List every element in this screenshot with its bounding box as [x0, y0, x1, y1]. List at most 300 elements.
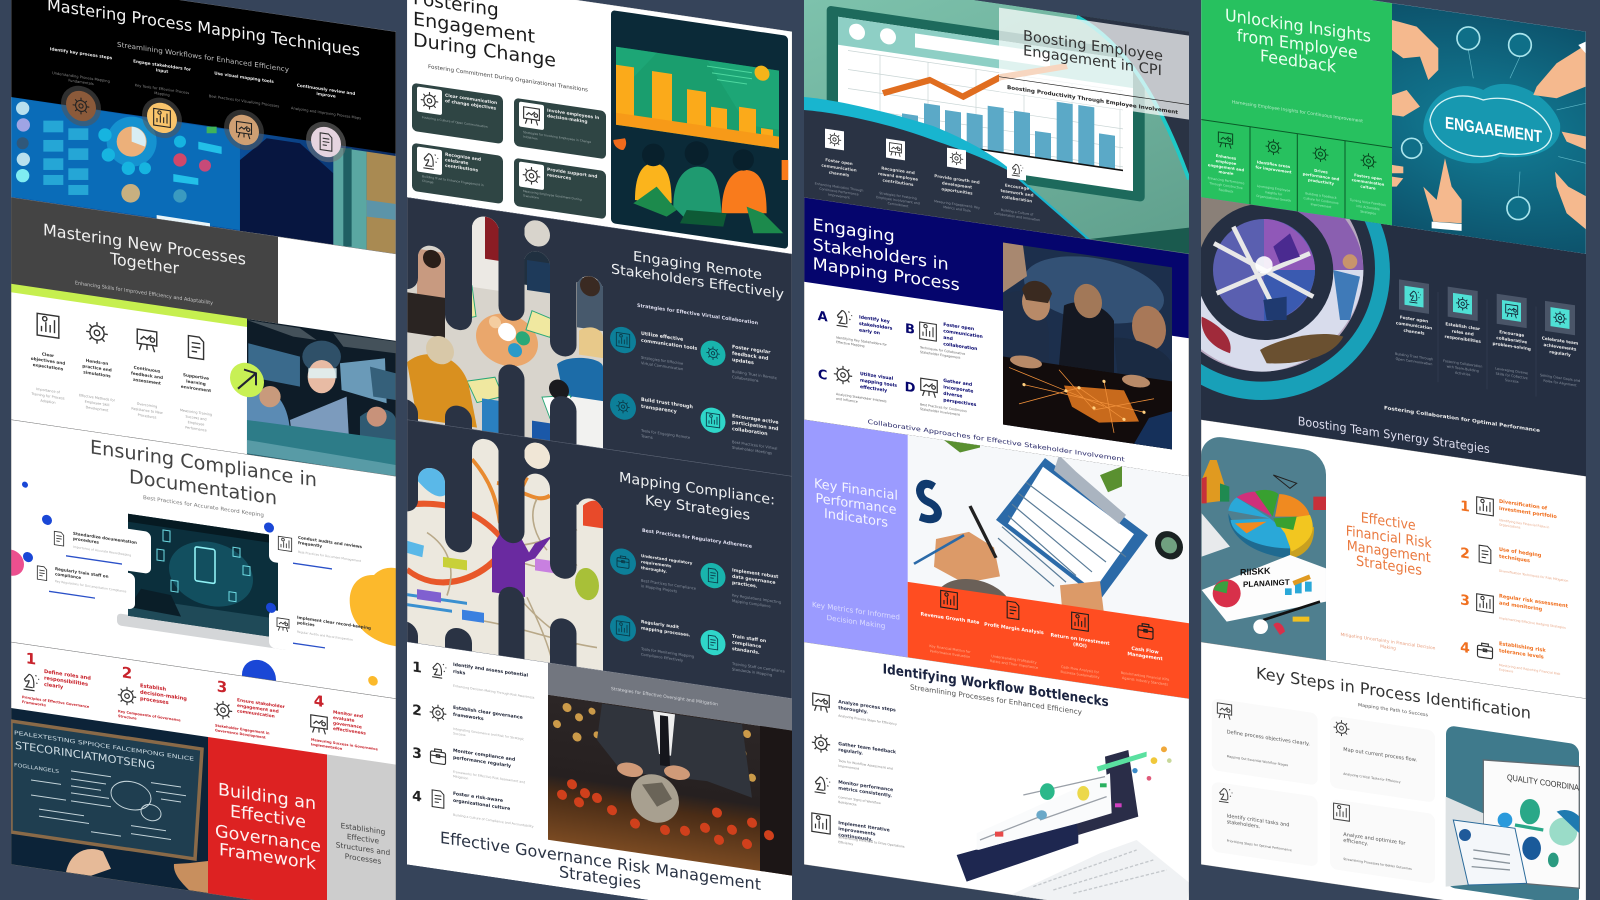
title overlay panel — [999, 8, 1189, 120]
step card 2 — [1330, 715, 1435, 803]
strategy 2: Key Regulations Impacting — [732, 593, 782, 605]
strategy 1: communication tools — [641, 338, 697, 352]
step 3: Monitor performance — [838, 779, 893, 793]
strategy 2: data governance — [732, 574, 776, 586]
strategy 3 — [610, 392, 693, 446]
step 2: Activities — [1455, 371, 1471, 377]
icon: arrow badge — [230, 362, 264, 398]
card: support: resources — [547, 172, 572, 182]
image: audience watching bar chart — [611, 10, 788, 259]
risk 3: Implementing Effective Hedging Strategies — [1499, 616, 1566, 630]
benefit 3: Drives — [1314, 168, 1329, 175]
title — [611, 245, 784, 303]
governance item 4: Implementation — [311, 742, 343, 751]
step 2 text: Engage stakeholders for — [133, 58, 192, 72]
title: Engaging — [813, 215, 895, 246]
step card 4: efficiency. — [1343, 838, 1369, 847]
strategy 1 — [610, 325, 697, 373]
image: chalkboard: PEALEXTESTING SPPIQCE FALCEMPONG ENLICE — [14, 730, 195, 763]
column 3: Overcoming — [137, 402, 157, 409]
step 2 text: Key Tools for Effective Process — [135, 83, 189, 95]
card: recognize: Building Trust to Enhance Engagement in — [422, 174, 484, 187]
item 1: Continuous Performance — [819, 187, 859, 197]
item A: Identify key — [859, 314, 890, 325]
strategy 2: Implement robust — [732, 567, 779, 580]
benefit 4 — [1349, 150, 1386, 217]
strategy 4: Training Staff on Compliance — [731, 662, 786, 674]
image: pie chart on desk — [1201, 434, 1326, 692]
column 3 — [131, 328, 163, 421]
risk 4: tolerance levels — [1499, 648, 1544, 661]
title: Financial Risk — [1346, 523, 1432, 552]
governance item 2: decision-making — [140, 689, 187, 702]
slide: Boosting Employee Engagement in CPI — [804, 0, 1189, 257]
strategy 3: transparency — [641, 404, 678, 415]
benefit 1: Through Constructive — [1208, 181, 1243, 190]
title: Engagement in CPI — [1023, 43, 1162, 79]
slide: Building an Effective Governance Framework — [11, 642, 396, 900]
step 3: Encourage — [1499, 329, 1524, 338]
slide: Boosting Team Synergy Strategies — [1133, 106, 1586, 476]
item A: stakeholders — [859, 321, 893, 332]
column 2: Employee Skill — [85, 400, 109, 407]
card: recognize: Recognize and — [445, 152, 481, 163]
risk 1: Diversification of — [1499, 499, 1548, 512]
item C: effectively — [860, 384, 887, 394]
item B — [905, 316, 983, 363]
step 1: Foster open — [1400, 315, 1428, 324]
item 2: Strategies for Fostering — [879, 191, 917, 201]
subtitle panel: grey: Effective — [347, 832, 380, 846]
subtitle: Enhancing Skills for Improved Efficiency and Adaptability — [75, 280, 213, 307]
metric 2 — [984, 598, 1044, 671]
item A — [818, 307, 893, 352]
item 4: teamwork and — [1000, 188, 1034, 198]
item D: Gather and — [943, 378, 972, 388]
item 1: Improvement — [828, 193, 850, 200]
risk item 3 — [412, 742, 525, 789]
subtitle panel: grey: Establishing — [341, 821, 386, 837]
left panel: purple: Performance — [815, 491, 896, 518]
item: standardize documentation: Standardize documentation — [73, 531, 137, 545]
step 2: with Team-Building — [1447, 364, 1479, 373]
risk item 2 — [412, 699, 524, 746]
dark swoosh with teal edge — [804, 96, 1094, 243]
item: standardize documentation: procedures — [73, 536, 100, 545]
title: Mapping Process — [813, 254, 960, 295]
item: regularly train staff: compliance — [55, 571, 81, 580]
step 3: collaborative — [1496, 335, 1527, 345]
image: monitor with chart — [827, 5, 1189, 254]
decorative circles — [11, 482, 396, 686]
benefit 1: employee — [1216, 158, 1237, 166]
card: clear communication: Clear communication — [445, 93, 497, 106]
strategy 1: Utilize effective — [641, 331, 684, 343]
image: chalkboard: STECORINCIATMOTSENG — [15, 740, 155, 772]
step 1 text: Identify key process steps — [50, 46, 113, 60]
image: circular team photo with rings — [1133, 143, 1390, 400]
slide: Key Financial Performance Indicators — [804, 416, 1189, 699]
title: Documentation — [129, 465, 277, 510]
left panel: purple: Indicators — [824, 507, 888, 531]
metric 3: Business Sustainability — [1061, 670, 1099, 680]
metric 1: Performance Evaluation — [930, 649, 970, 659]
item: conduct audits: Best Practices for Document Management — [298, 550, 362, 563]
item 4: Encourage — [1005, 183, 1029, 191]
item 1: Enhancing Motivation Through — [815, 182, 863, 193]
item C: and Influence — [836, 397, 858, 404]
image: team around table (masked) — [407, 197, 603, 449]
governance item 1: responsibilities — [44, 675, 88, 688]
title: Boosting Employee — [1023, 28, 1163, 65]
step 2: regularly. — [838, 747, 863, 757]
title — [1023, 28, 1163, 80]
step card 3 — [1212, 781, 1318, 867]
item 3 — [934, 146, 980, 214]
benefit 2: Insights for — [1265, 190, 1283, 197]
strategy 2: feedback and — [732, 351, 769, 362]
risk item 3: performance regularly — [453, 755, 511, 769]
governance item 1: Principles of Effective Governance — [22, 695, 90, 709]
title: Engagement — [413, 9, 535, 48]
governance item 3: Ensure stakeholder — [237, 697, 286, 710]
step 4 text: Continuously review and — [297, 83, 355, 96]
card: clear communication: Fostering a Culture of Open Communication — [422, 115, 488, 129]
title: Feedback — [1260, 46, 1336, 76]
step 1: communication — [1396, 320, 1432, 331]
step 4: Roles for Alignment — [1543, 379, 1577, 388]
slide: Engaging Remote Stakeholders Effectively — [391, 165, 792, 516]
benefit 3: performance and — [1303, 171, 1340, 182]
metric 3 — [1050, 609, 1110, 681]
title panel: red: Effective — [230, 802, 306, 833]
risk 1: 1 — [1460, 498, 1470, 516]
strategy 2: Building Trust in Remote — [732, 370, 778, 380]
strategy 4: Best Practices for Virtual — [732, 440, 777, 451]
metric 3: Return on Investment — [1050, 632, 1110, 647]
benefit 3 — [1303, 144, 1340, 210]
risk item 4: Building a Culture of Compliance and Accountability — [453, 813, 534, 829]
step 2: Establish clear — [1445, 321, 1481, 331]
title — [619, 470, 775, 528]
benefit 2: for improvement — [1256, 164, 1292, 175]
card: recognize — [412, 143, 503, 204]
risk item 4: 4 — [412, 788, 422, 806]
column 4 — [180, 334, 212, 433]
card: support — [514, 158, 606, 219]
subtitle: Fostering Collaboration for Optimal Performance — [1384, 405, 1541, 434]
step 4: continuously. — [838, 832, 873, 843]
step 3: Success — [1505, 378, 1519, 384]
metric 4 — [1121, 620, 1169, 687]
step 4 text: improve — [316, 91, 336, 99]
step 1 — [1395, 279, 1433, 366]
governance item 2: processes — [140, 696, 169, 706]
strategy 4 — [700, 628, 786, 679]
step card 4 — [1330, 799, 1435, 884]
item C: C — [818, 367, 827, 384]
risk 2: techniques — [1499, 554, 1530, 564]
subtitle: Fostering Commitment During Organizational Transitions — [428, 64, 588, 94]
green panel — [1201, 0, 1392, 226]
icon circle 2 — [142, 98, 182, 138]
strategy 2 — [700, 561, 782, 610]
metric 2: Ratios and Their Importance — [990, 659, 1038, 670]
card: clear communication: of change objectives — [445, 98, 497, 112]
title: Strategies — [559, 862, 641, 893]
image: process map and businessman — [11, 97, 396, 254]
title: Ensuring Compliance in — [90, 435, 317, 492]
card: involve employees: decision-making — [547, 113, 587, 125]
benefit 1: morale — [1219, 169, 1234, 176]
strategy 4: Train staff on — [732, 633, 766, 644]
title — [1346, 508, 1432, 581]
header panel — [11, 197, 278, 324]
column 3: assessment — [133, 377, 161, 386]
risk 4: 4 — [1460, 640, 1470, 657]
card: recognize: Change — [422, 179, 434, 184]
item: regularly train staff: Key Regulations for Documentation Compliance — [55, 579, 127, 594]
item D: diverse — [943, 391, 962, 400]
column 1: expectations — [33, 362, 64, 372]
image: woman with VR visor — [246, 319, 396, 476]
column 1: Adoption — [40, 399, 56, 405]
title: Stakeholders Effectively — [611, 261, 784, 303]
card: involve employees: Strategies for Involving Employees in Change — [523, 130, 591, 144]
illustration: laptop workflow map — [957, 746, 1190, 900]
column 1: Training for Process — [30, 392, 65, 401]
image: team over glowing map — [1003, 243, 1172, 449]
risk item 1 — [412, 656, 535, 700]
column 1: Clear — [42, 351, 55, 358]
governance item 1: Define roles and — [44, 669, 91, 682]
strategy 3: Regularly audit — [641, 619, 679, 631]
image: quality coordination certificate: QUALITY COORDINA — [1507, 772, 1579, 793]
benefit 4: into Actionable — [1356, 204, 1380, 211]
item 3: Provide growth and — [934, 173, 980, 185]
strategy 3 — [610, 613, 695, 664]
risk item 4: organizational culture — [453, 798, 510, 812]
step 2 text: input — [156, 67, 168, 74]
slide: Mastering Process Mapping Techniques — [11, 0, 396, 254]
governance item 2: Key Components of Governance — [118, 709, 181, 723]
left panel: purple: Decision Making — [827, 613, 885, 631]
mask capsules — [391, 387, 576, 707]
image: businessman with globe and pins — [548, 695, 792, 876]
item B: B — [905, 322, 915, 338]
title panel: red: Framework — [219, 840, 316, 874]
risk 4: Establishing risk — [1499, 641, 1546, 654]
risk item 1: Enhancing Decision-Making Through Risk Awareness — [453, 684, 535, 700]
title: Identifying Workflow Bottlenecks — [883, 661, 1109, 710]
strategy 2: Collaborations — [732, 375, 759, 383]
slide: Ensuring Compliance in Documentation — [0, 418, 396, 714]
step 4 text: Analyzing and Improving Process Maps — [291, 106, 361, 120]
column 3: feedback and — [131, 370, 163, 380]
column 4: Supportive — [183, 372, 209, 381]
benefit 4: culture — [1360, 184, 1376, 191]
benefit 2: Identifies areas — [1257, 159, 1291, 169]
step 3: Bottlenecks — [838, 800, 857, 807]
item D: Best Practices for Continuous — [920, 402, 967, 413]
strategy 1: in Mapping Projects — [641, 584, 677, 593]
step 2: Improvement — [838, 764, 860, 771]
card: support: Transitions — [522, 193, 539, 200]
item 3: Metrics and Tools — [943, 205, 971, 213]
card: involve employees: Initiatives — [523, 135, 538, 141]
step card 3: stakeholders. — [1227, 819, 1261, 830]
column 2: Development — [86, 405, 109, 413]
strategy 2: Mapping Compliance — [732, 599, 771, 609]
slide: Unlocking Insights from Employee Feedback — [1201, 0, 1587, 260]
item D: incorporate — [943, 384, 973, 395]
title: Boosting Team Synergy Strategies — [1298, 414, 1490, 456]
benefit 1: Enhances — [1216, 153, 1237, 161]
title: Key Steps in Process Identification — [1256, 663, 1531, 723]
subtitle: Streamlining Processes for Enhanced Efficiency — [910, 682, 1082, 717]
title: Effective Governance Risk Management — [440, 828, 761, 894]
image: quality coordination certificate — [1446, 725, 1579, 900]
step 3 — [1493, 293, 1531, 386]
strategy 3: Compliance Effectively — [641, 653, 684, 663]
item B: Techniques for Collaborative — [919, 345, 965, 356]
risk 3: Regular risk assessment — [1499, 593, 1569, 610]
governance item 2 — [118, 666, 186, 722]
grey band — [548, 663, 792, 731]
title: Strategies — [1356, 553, 1422, 579]
risk 2: 2 — [1460, 545, 1470, 563]
governance item 1: 1 — [26, 649, 36, 669]
slide: Effective Governance Risk Management Strategies — [407, 642, 792, 900]
metric 1 — [921, 587, 980, 660]
step 1: thoroughly. — [838, 705, 868, 715]
benefit 1: Feedback — [1219, 188, 1234, 194]
title: Key Strategies — [645, 493, 750, 524]
item 4: Building a Culture of — [1001, 208, 1034, 217]
step 3: Common Signs of Workflow — [838, 795, 881, 805]
strategy 1: Understand regulatory — [641, 553, 693, 566]
subtitle: Making — [1380, 644, 1396, 652]
column 1: objectives and — [31, 356, 65, 366]
item 1 — [815, 127, 863, 202]
strategy 4: participation and — [732, 420, 779, 432]
title — [413, 0, 556, 72]
item B: collaboration — [943, 341, 977, 352]
step 2: Fostering Collaboration — [1443, 359, 1482, 369]
card: clear communication — [412, 83, 503, 144]
title — [1225, 6, 1371, 81]
item D: D — [905, 380, 916, 396]
item A: early on — [859, 327, 880, 336]
icon circle 4 — [306, 122, 346, 162]
step 4: Streamlining Workflow to Drive Operations — [838, 835, 905, 849]
strategy 4: compliance — [732, 640, 761, 650]
step 2: roles and — [1452, 328, 1474, 337]
risk item 2: Success — [453, 731, 466, 737]
step card 4: Streamlining Processes for Better Outcomes — [1343, 857, 1412, 871]
step 4 — [812, 813, 905, 854]
title: Stakeholders in — [813, 235, 949, 274]
governance item 4: 4 — [314, 692, 324, 711]
governance item 2: 2 — [122, 663, 132, 683]
subtitle: Best Practices for Regulatory Adherence — [642, 528, 753, 550]
risk item 3: Frameworks for Effective Risk Assessment and — [453, 770, 525, 784]
benefit 3: productivity — [1308, 177, 1335, 186]
subtitle: Streamlining Workflows for Enhanced Efficiency — [117, 41, 289, 74]
title: Together — [109, 249, 179, 278]
strategy 4: standards. — [732, 646, 760, 656]
item D: Stakeholder Involvement — [920, 407, 961, 417]
title: Effective — [1361, 510, 1416, 534]
strategy 3: Teams — [640, 434, 653, 440]
risk 4 — [1460, 635, 1560, 681]
image: hands signing clipboard — [908, 431, 1189, 626]
risk 1: Organizations — [1499, 523, 1521, 530]
step 3 text: Best Practices for Visualizing Processes — [209, 94, 279, 108]
risk 3: 3 — [1460, 592, 1470, 610]
step 4: Celebrate team — [1542, 335, 1579, 346]
column 3: Resistance to New — [131, 407, 163, 415]
column 3: Continuous — [134, 365, 161, 374]
card: support: Provide support and — [547, 167, 597, 180]
column 4: Success and — [185, 414, 207, 422]
item 2: Commitment — [888, 201, 909, 208]
risk item 2: Establish clear governance — [453, 705, 523, 721]
column 4: learning — [186, 379, 206, 386]
metric 3: (ROI) — [1073, 642, 1087, 650]
strategy 1: thoroughly. — [641, 565, 667, 574]
subtitle: Harnessing Employee Insights for Continuous Improvement — [1232, 99, 1363, 125]
slide: Fostering Engagement During Change — [407, 0, 792, 260]
metric 2: Understanding Profitability — [991, 654, 1037, 665]
step 2: Tools for Workflow Assessment and — [837, 759, 893, 771]
item 1: communication — [821, 163, 857, 173]
benefit 2: Organizational Growth — [1256, 194, 1291, 203]
column 4: Measuring Training — [180, 408, 212, 417]
risk item 3: 3 — [412, 745, 422, 763]
navy header band — [804, 197, 1189, 338]
step 1 — [813, 693, 897, 726]
governance item 4: Measuring Success in Governance — [311, 738, 378, 752]
green accent band — [11, 284, 247, 327]
risk item 2: frameworks — [453, 712, 484, 722]
column 2: Effective Methods for — [79, 393, 116, 403]
item 3: opportunities — [941, 186, 973, 196]
item 1: Foster open — [825, 157, 853, 166]
item 4: Collaboration and Innovation — [994, 211, 1040, 222]
strategy 4: collaboration — [732, 426, 768, 437]
metric 1: Revenue Growth Rate — [921, 611, 980, 626]
strategy 4: Encourage active — [732, 413, 779, 426]
step 4: regularly — [1549, 349, 1571, 357]
governance item 3: engagement and — [237, 703, 279, 715]
risk item 4: Foster a risk-aware — [453, 791, 503, 804]
item 2: Employee Involvement and — [876, 195, 920, 206]
subtitle panel: grey: Processes — [345, 852, 381, 866]
title panel: red: Building an — [218, 780, 316, 814]
subtitle panel: grey: Structures and — [336, 840, 390, 857]
governance item 1: Frameworks — [22, 700, 46, 707]
image: pie chart on desk: PLANAINGT — [1243, 578, 1290, 589]
title: Mapping Compliance: — [619, 470, 775, 509]
item 4: collaboration — [1002, 194, 1032, 204]
step 2 text: Mapping — [154, 91, 170, 97]
benefit 3: Culture for Continuous — [1304, 196, 1339, 205]
risk 4: Monitoring and Reporting Financial Risk — [1499, 663, 1560, 676]
step 4: achievements — [1544, 342, 1577, 352]
slide: Effective Financial Risk Management Strategies — [1201, 420, 1586, 731]
metric 3: Cash Flow Analysis for — [1061, 665, 1100, 675]
